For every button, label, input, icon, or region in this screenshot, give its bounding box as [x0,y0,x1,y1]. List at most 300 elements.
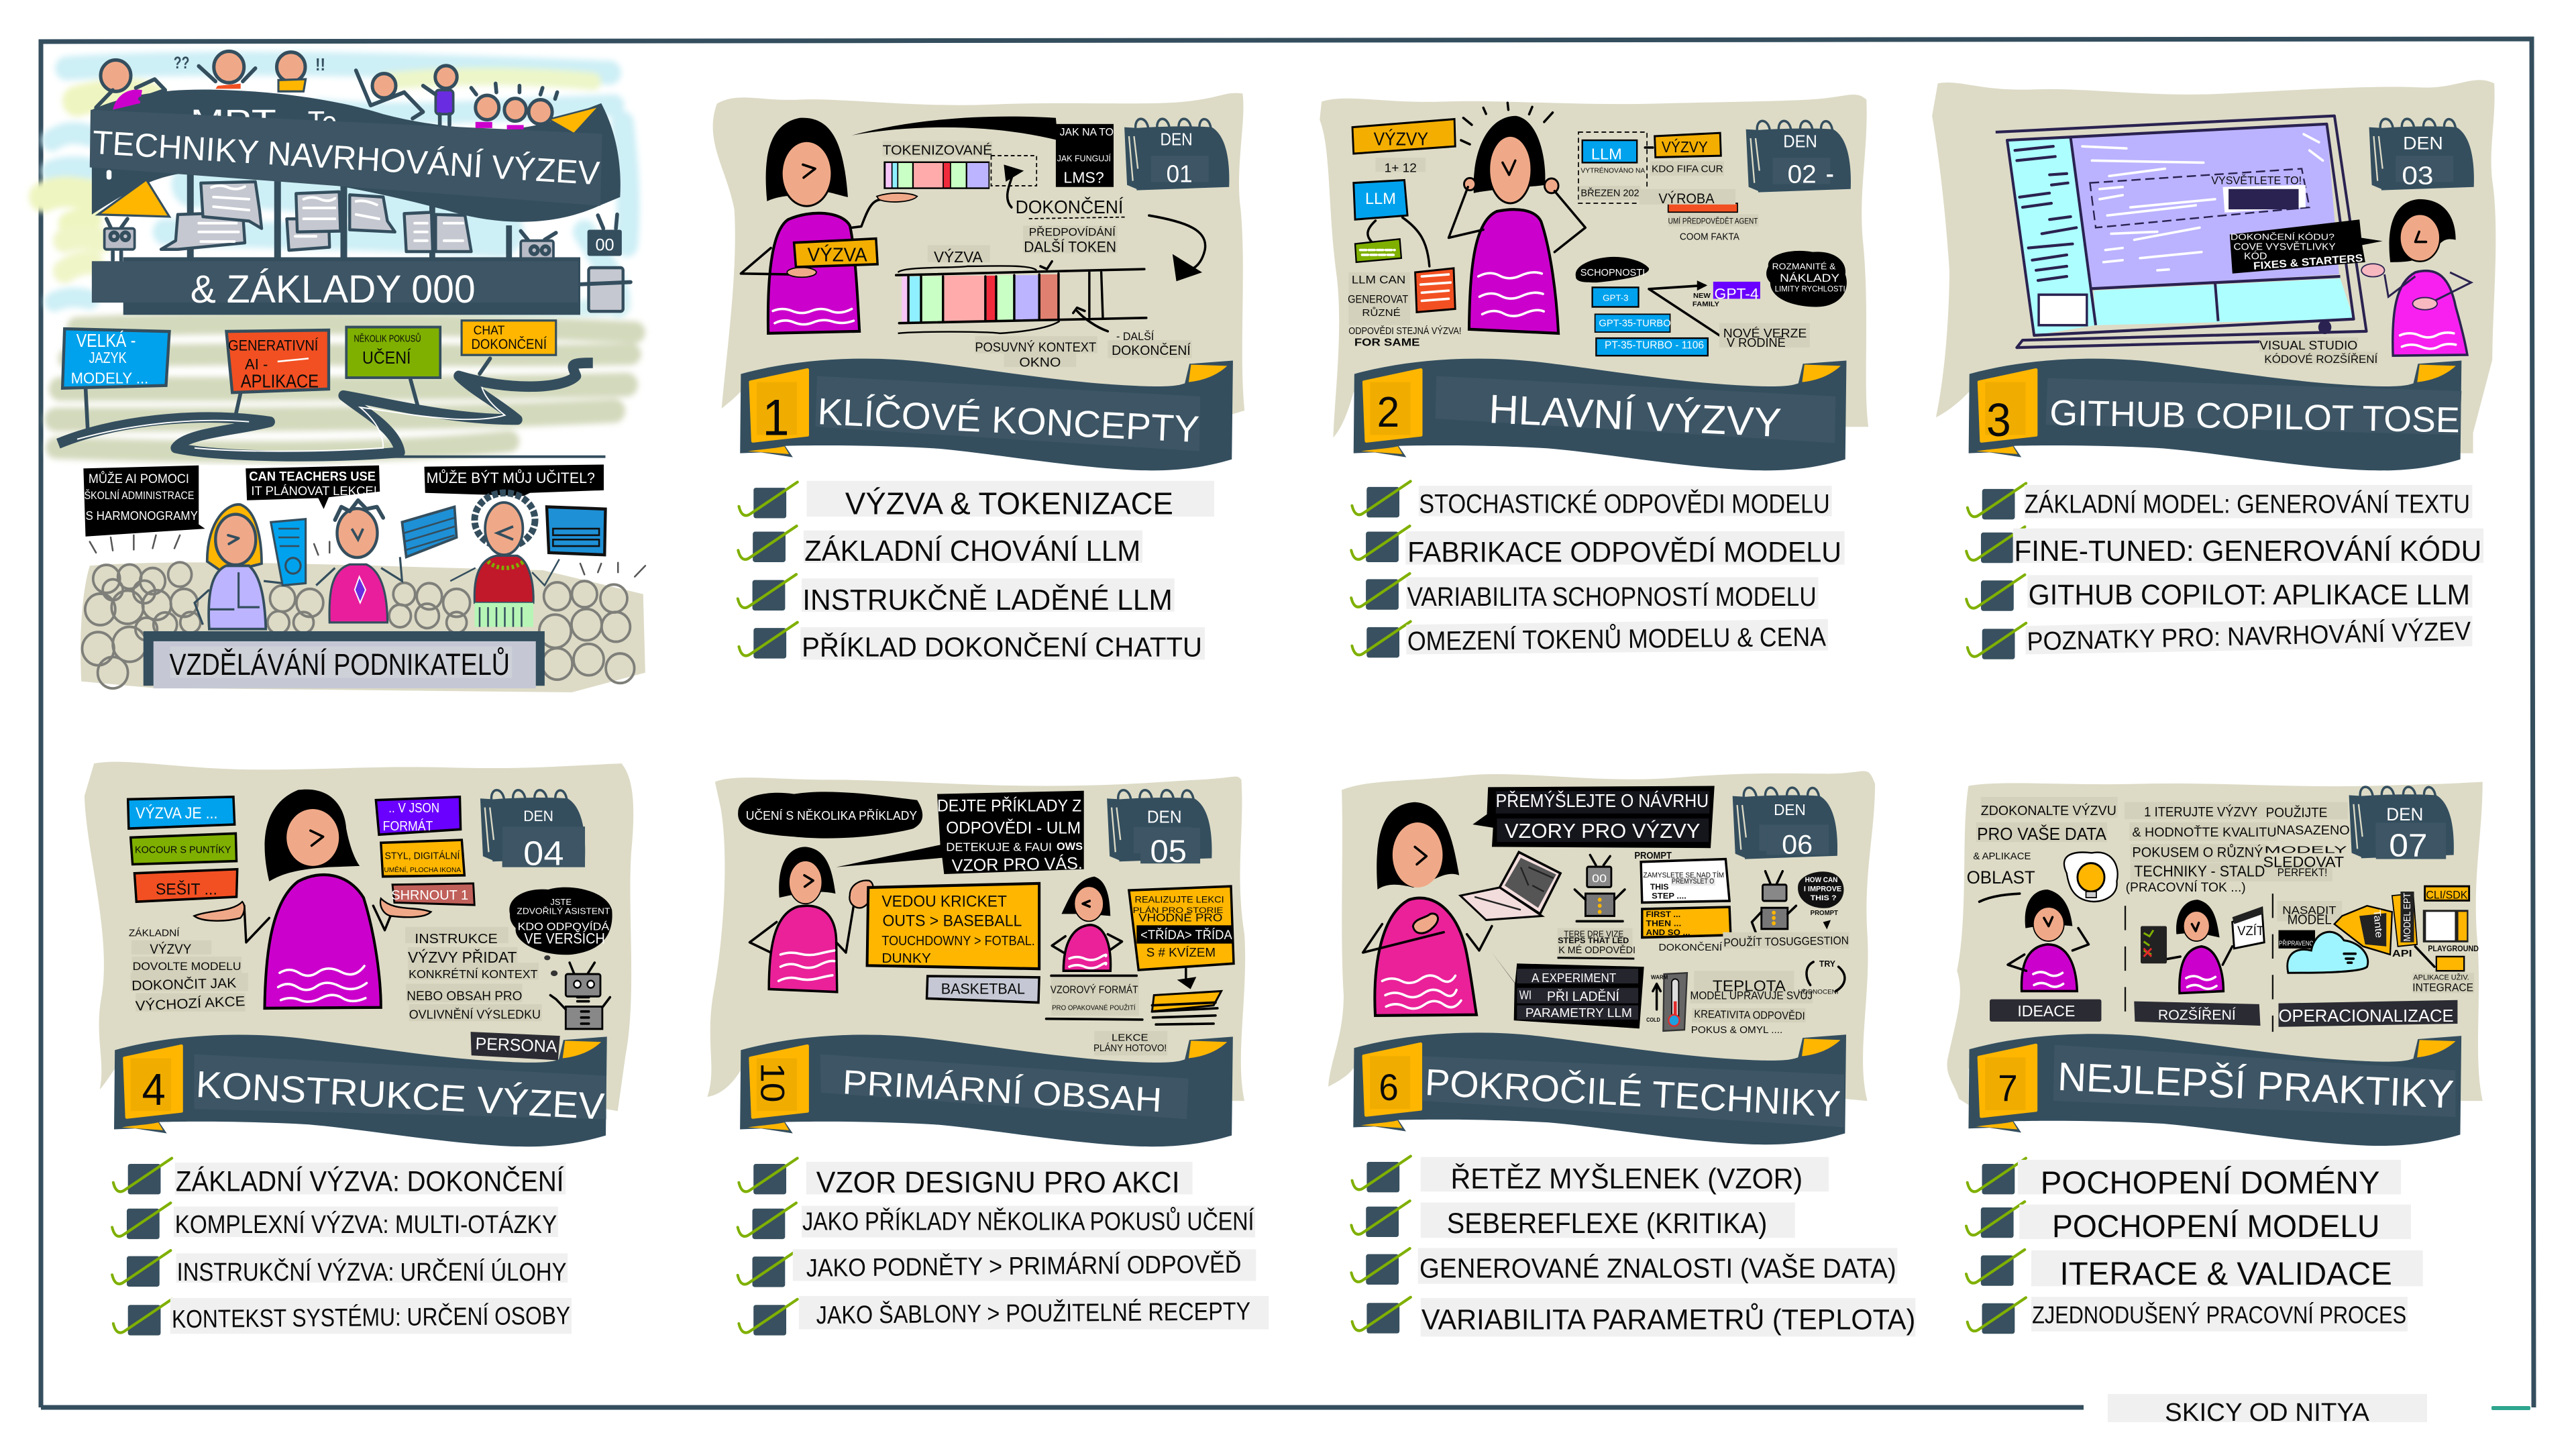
steps note: TERE DRE VIZE [1564,929,1623,938]
sign: large language models: JAZYK [89,348,127,366]
class template card: PLÁN PRO STORIE [1133,906,1224,915]
sign: chat completion [462,321,556,374]
banner heading: GITHUB COPILOT TOSE [2049,393,2460,441]
cloud: few-shot [738,792,922,839]
completion labels: DOKONČENÍ [1016,196,1124,217]
experiment callout: WI [1519,988,1532,1002]
sliding window bar: OKNO [1019,356,1061,370]
calendar day 06: DEN [1774,802,1806,818]
training data note: UMÍ PŘEDPOVĚDĚT AGENT [1668,217,1758,225]
deployment diagram: CLI/SDK [2426,888,2467,901]
right note [405,927,542,1022]
basketball answer [927,976,1039,1002]
temperature note: POKUS & OMYL .... [1691,1025,1782,1036]
thought cloud [509,888,612,976]
characters on the ribbon: ?? [174,54,190,72]
iterate note: TECHNIKY - STALD [2134,863,2265,880]
checklist: ZÁKLADNÍ CHOVÁNÍ LLM [804,535,1140,568]
backdrop [1947,782,2483,1105]
sign: generative AI apps: AI - [245,356,268,373]
black callout: DOKONČENÍ KÓDU? [2231,231,2334,242]
winding road [58,363,593,456]
model capabilities: GPT-3 [1603,292,1629,303]
model capabilities: PT-35-TURBO - 1106 [1605,339,1704,351]
iterate note: POKUSEM O RŮZNÝ [2132,844,2263,861]
yellow example card: VEDOU KRICKET [881,892,1007,910]
sliding window bar [896,245,1192,370]
banner heading [1968,1034,2461,1146]
checklist: ITERACE & VALIDACE [2059,1256,2392,1292]
deployment diagram: INTEGRACE [2412,982,2473,994]
stack of plans [1093,969,1222,1055]
template format: PRO OPAKOVANÉ POUŽITÍ [1052,1004,1136,1012]
checklist: INSTRUKČNÍ VÝZVA: URČENÍ ÚLOHY [177,1258,566,1286]
checklist: JAKO PŘÍKLADY NĚKOLIKA POKUSŮ UČENÍ [802,1207,1254,1236]
calendar day 05: 05 [1150,833,1187,869]
educator: teacher [316,500,457,623]
steps note: K MÉ ODPOVĚDI [1558,945,1635,956]
thought cloud: VE VERŠÍCH [524,930,605,947]
temperature note: MODEL UPRAVUJE SVŮJ [1690,989,1813,1002]
right note: OVLIVNĚNÍ VÝSLEDKU [409,1007,541,1022]
checklist: OMEZENÍ TOKENŮ MODELU & CENA [1407,621,1826,657]
pillars and robots [105,173,631,311]
backdrop [1320,95,1868,438]
right prompt cards: UMĚNÍ, PLOCHA IKONA [384,865,462,874]
left note [129,927,248,1014]
stochastic text: GENEROVAT [1348,292,1408,306]
steps note [1558,928,1635,959]
banner heading: HLAVNÍ VÝZVY [1488,386,1782,445]
class template card: S # KVÍZEM [1146,945,1216,959]
ideation column [1967,797,2118,902]
checklist: STOCHASTICKÉ ODPOVĚDI MODELU [1419,490,1830,519]
checklist: JAKO ŠABLONY > POUŽITELNÉ RECEPTY [816,1297,1250,1329]
cloud: cost and limits: ROZMANITÉ & [1772,261,1836,272]
callout: give examples: OWS [1057,841,1083,853]
backdrop [707,777,1245,1101]
checklist: JAKO PODNĚTY > PRIMÁRNÍ ODPOVĚĎ [806,1250,1242,1282]
calendar day 06 [1733,788,1837,860]
try evaluate loop [1798,959,1845,996]
thought cloud: ZDVOŘILÝ ASISTENT [517,906,610,916]
prompt to LLM flow: VÝZVY [1374,128,1428,149]
calendar day 03 [2369,119,2474,191]
temperature note: TEPLOTA [1713,977,1786,995]
augmentation person: VZÍT [2237,924,2265,938]
right note: INSTRUKCE [415,932,498,947]
right prompt cards: STYL, DIGITÁLNÍ [385,850,460,862]
watercolor ground [56,323,635,452]
callout: give examples: ODPOVĚDI - ULM [946,819,1081,838]
right prompt cards: .. V JSON [388,800,439,816]
crowd backdrop [80,562,645,692]
iterate note: 1 ITERUJTE VÝZVY [2144,804,2258,820]
left note: DOVOLTE MODELU [133,960,241,973]
iterate note: MODELY [2264,845,2347,856]
sign: generative AI apps: GENERATIVNÍ [228,337,318,354]
model capabilities: FAMILY [1693,301,1719,308]
checklist: GITHUB COPILOT: APLIKACE LLM [2029,579,2470,610]
accent stroke [2491,1406,2530,1410]
characters on the ribbon [96,51,557,129]
calendar day 01: 01 [1167,160,1193,188]
banner heading: KONSTRUKCE VÝZEV [195,1063,605,1128]
persona tag: PERSONA [475,1035,557,1057]
prompt cards: AND SO ... [1646,928,1690,937]
callout: design patterns: VZORY PRO VÝZVY [1505,820,1701,843]
checklist [112,1159,572,1336]
panel: day 6 advanced techniques [1328,771,1915,1336]
sign: few-shot learning: NĚKOLIK POKUSŮ [354,332,421,344]
experiment callout [1492,953,1644,1028]
right note: NEBO OBSAH PRO [407,989,522,1004]
characters on the ribbon: !! [315,56,325,74]
stochastic text [1348,272,1461,349]
iterate note: & HODNOŤTE KVALITU [2132,825,2277,840]
iterate note: NASAZENO [2277,824,2350,838]
calendar day 02: DEN [1783,133,1817,152]
checklist: VARIABILITA PARAMETRŮ (TEPLOTA) [1421,1303,1915,1336]
cloud: cost and limits: LIMITY RYCHLOSTI [1775,284,1845,294]
ribbon: main title: Te [308,106,337,140]
watercolor sky [44,64,628,309]
banner heading: NEJLEPŠÍ PRAKTIKY [2057,1055,2455,1117]
model capabilities: V RODINĚ [1727,335,1786,350]
banner heading: 7 [1998,1067,2018,1109]
thermometer: COLD [1646,1017,1660,1023]
arrow: big curved [1149,215,1205,281]
sliding window bar: VÝZVA [934,248,983,266]
persona tag [471,1032,560,1060]
sign: few-shot learning: UČENÍ [362,348,411,368]
robot: self reflection: HOW CAN [1805,876,1837,884]
class template card: REALIZUJTE LEKCI [1134,894,1224,904]
yellow example card: DUNKY [881,951,931,966]
ideation column: OBLAST [1967,867,2035,888]
prompt to LLM flow: LLM [1365,191,1396,208]
ideation column: PRO VAŠE DATA [1977,824,2106,844]
class template card [1129,886,1234,970]
robot: think: 00 [1592,872,1607,885]
completion labels: DALŠÍ TOKEN [1024,238,1116,256]
model capabilities: NOVÉ VERZE [1723,326,1807,340]
sign: large language models: MODELY ... [71,369,148,387]
robot: self reflection: PROMPT [1811,910,1838,917]
left prompt cards [128,797,237,902]
banner heading: PRIMÁRNÍ OBSAH [842,1063,1163,1120]
callout: give examples: DETEKUJE & FAUI [946,841,1052,854]
panel: day 3 github copilot [1932,80,2496,659]
deployment diagram: MODEL EPT [2402,892,2413,942]
prompt cards [1634,851,1731,938]
extension label: VISUAL STUDIO [2259,339,2357,352]
calendar day 03: DEN [2403,133,2443,154]
checklist: ZJEDNODUŠENÝ PRACOVNÍ PROCES [2032,1301,2406,1329]
checklist: SEBEREFLEXE (KRITIKA) [1447,1208,1767,1239]
cloud: cost and limits [1766,251,1847,307]
stack of plans: LEKCE [1112,1032,1148,1044]
panel: day 7 best practices [1947,782,2483,1334]
banner heading [740,1034,1233,1146]
panel: day 2 main challenges [1320,95,1868,657]
credit [2108,1394,2427,1427]
swoosh and black note [852,117,1114,187]
deployment diagram: Tante [2371,909,2384,938]
completion note: POUŽÍT TOSUGGESTION [1723,934,1849,949]
iterate note: (PRACOVNÍ TOK ...) [2126,881,2246,895]
idea person with bulb [2008,853,2118,991]
calendar day 03: 03 [2402,162,2433,190]
training data note: VÝZVY [1662,139,1708,156]
credit: SKICY OD NITYA [2165,1399,2370,1427]
deployment diagram: PLAYGROUND [2428,944,2479,953]
banner heading: 3 [1986,395,2011,447]
augmentation tag [2134,1002,2261,1026]
right note: KONKRÉTNÍ KONTEXT [409,968,538,981]
checklist: VARIABILITA SCHOPNOSTÍ MODELU [1407,582,1817,612]
completion labels [1016,196,1127,256]
model capabilities: GPT-4 [1715,286,1759,302]
banner heading: 4 [142,1065,166,1115]
prompt cards: PROMPT [1634,851,1672,861]
callout: design patterns: PŘEMÝŠLEJTE O NÁVRHU [1496,790,1709,811]
checklist: POCHOPENÍ DOMÉNY [2041,1165,2379,1200]
calendar day 04: DEN [523,808,553,824]
banner heading [740,359,1233,470]
robot [550,963,610,1029]
callout: give examples: VZOR PRO VÁS. [951,855,1083,875]
calendar day 05 [1107,790,1212,869]
speech: admin: MŮŽE AI POMOCI [89,471,189,486]
left note: ZÁKLADNÍ [129,927,180,939]
speech: lesson plans [246,466,380,509]
calendar day 07: 07 [2389,827,2428,864]
completion note: DOKONČENÍ [1658,942,1723,953]
calendar day 02 [1746,121,1851,193]
swoosh and black note: JAK FUNGUJÍ [1057,153,1111,164]
speech: lesson plans: IT PLÁNOVAT LEKCE! [251,484,377,498]
robot: self reflection: I IMPROVE [1804,885,1841,894]
sign: generative AI apps: APLIKACE [241,371,319,391]
checklist [1351,481,1845,657]
calendar day 01: DEN [1160,131,1193,149]
checklist: POCHOPENÍ MODELU [2052,1208,2379,1244]
sliding window bar: - DALŠÍ [1116,330,1155,343]
checklist: GENEROVANÉ ZNALOSTI (VAŠE DATA) [1419,1253,1896,1284]
operationalize tag [2279,1000,2457,1027]
checklist: KONTEKST SYSTÉMU: URČENÍ OSOBY [172,1301,570,1333]
checklist: ŘETĚZ MYŠLENEK (VZOR) [1451,1163,1803,1195]
calendar day 06: 06 [1782,830,1813,860]
training data note: COOM FAKTA [1680,231,1739,243]
black callout: KÓD [2244,250,2267,262]
swoosh and black note: LMS? [1063,169,1104,186]
educator: administrator [195,504,306,629]
deployment diagram: API [2392,949,2412,959]
deployment diagram: MODEL [2288,912,2332,928]
steps note: STEPS THAT LED [1558,936,1629,945]
sign: chat completion: DOKONČENÍ [471,337,547,352]
class template card: VHODNÉ PRO [1138,911,1222,924]
iterate note: SLEDOVAT [2263,854,2344,871]
confused person [1449,103,1585,333]
deployment diagram: NASADIT [2282,904,2337,916]
stack of plans: PLÁNY HOTOVO! [1093,1042,1167,1054]
swoosh and black note: JAK NA TO [1060,126,1114,138]
sign: chat completion: CHAT [474,323,505,337]
checklist: KOMPLEXNÍ VÝZVA: MULTI-OTÁZKY [175,1210,557,1238]
ribbon: subtitle [92,257,580,315]
small person [1052,877,1122,971]
banner heading: 6 [1379,1067,1399,1108]
banner heading: 1 [763,389,790,446]
speech: tutor: MŮŽE BÝT MŮJ UČITEL? [427,469,595,486]
basketball answer: BASKETBAL [941,980,1025,998]
banner heading: KLÍČOVÉ KONCEPTY [817,390,1200,451]
extension label: KÓDOVÉ ROZŠÍŘENÍ [2264,353,2378,366]
checklist: ZÁKLADNÍ VÝZVA: DOKONČENÍ [176,1166,564,1197]
augmentation person [2141,900,2265,994]
ideation column: ZDOKONALTE VÝZVU [1981,803,2116,818]
stochastic text: RŮZNÉ [1362,306,1401,319]
experiment callout: PŘI LADĚNÍ [1547,989,1620,1004]
banner heading [1354,359,1846,470]
pillars and robots: 00 [596,236,614,255]
left note: VÝCHOZÍ AKCE [135,994,246,1014]
person explaining [194,790,431,1008]
sliding window bar: DOKONČENÍ [1112,342,1191,358]
iterate note: POUŽIJTE [2266,805,2327,820]
sliding window bar: POSUVNÝ KONTEXT [975,341,1097,355]
cloud: cost and limits: NÁKLADY [1780,272,1839,284]
try evaluate loop: TRY [1819,959,1835,969]
podium label [144,631,545,688]
code editor window: VYSVĚTLETE TO! [2211,174,2302,187]
prompt cards: FIRST ... [1646,910,1680,919]
banner heading [114,1034,607,1146]
experiment callout: PARAMETRY LLM [1525,1006,1632,1020]
right note: VÝZVY PŘIDAT [408,949,517,966]
backdrop [713,93,1244,415]
right prompt cards: FORMÁT [383,818,433,834]
tokenized bar: TOKENIZOVANÉ [883,142,992,158]
ribbon: main title [90,90,621,222]
template format [1046,975,1142,1020]
panel: title and overview [44,51,645,692]
speech: admin: ŠKOLNÍ ADMINISTRACE [85,489,194,502]
temperature note: KREATIVITA ODPOVĚDI [1694,1007,1805,1022]
sign: few-shot learning [346,327,440,410]
checklist: PŘÍKLAD DOKONČENÍ CHATTU [802,632,1202,663]
training data note: VÝROBA [1658,191,1715,207]
banner heading: 2 [1377,389,1399,437]
checklist: FINE-TUNED: GENEROVÁNÍ KÓDU [2014,535,2481,568]
speech: admin: S HARMONOGRAMY [85,509,198,523]
thought cloud: KDO ODPOVÍDÁ [518,921,610,933]
ideation column: & APLIKACE [1973,851,2031,862]
sign: large language models [62,329,169,428]
checklist: FABRIKACE ODPOVĚDÍ MODELU [1407,536,1841,568]
temperature note [1690,971,1813,1036]
calendar day 02: 02 [1788,160,1817,189]
speech: lesson plans: CAN TEACHERS USE [249,470,376,484]
training data note: LLM [1591,146,1622,163]
calendar day 04 [480,790,585,873]
sign: generative AI apps [227,330,329,415]
panel: day 4 prompt construction [85,762,633,1336]
calendar day 07 [2349,787,2454,864]
checklist [738,1159,1269,1336]
completion labels: PŘEDPOVÍDÁNÍ [1029,225,1116,239]
robot: self reflection [1752,871,1844,932]
speech: tutor [424,464,604,496]
bubble text strokes [199,186,463,241]
column dashes [2125,894,2273,1032]
calendar day 01 [1124,119,1229,191]
banner heading [1969,359,2461,470]
ribbon: main title: TECHNIKY NAVRHOVÁNÍ VÝZEV [91,124,601,193]
thermometer: WARM [1651,974,1668,980]
educator: tutor [450,493,605,627]
thermometer [1646,973,1687,1031]
model capabilities [1576,257,1810,356]
left note: VÝZVY [150,941,191,957]
checklist [1351,1156,1915,1336]
calendar day 04: 04 [523,834,564,873]
calendar day 07: DEN [2386,804,2423,824]
cloud: few-shot: UČENÍ S NĚKOLIKA PŘÍKLADY [746,808,917,822]
callout: give examples: DEJTE PŘÍKLADY Z [937,797,1081,816]
completion note [1658,932,1849,953]
stochastic text: FOR SAME [1354,337,1419,349]
crowd [82,535,645,688]
template format: VZOROVÝ FORMÁT [1051,984,1138,996]
stochastic text: LLM CAN [1352,273,1405,286]
developer person [2361,199,2471,356]
backdrop [85,762,633,1111]
person with prompt [741,118,917,333]
panel: day 5 primary content [707,777,1269,1336]
ribbon: subtitle: & ZÁKLADY 000 [191,268,476,311]
sign: large language models: VELKÁ - [76,330,136,351]
checklist: INSTRUKČNĚ LADĚNÉ LLM [802,584,1173,616]
checklist [1966,1159,2423,1334]
training data note: KDO FIFA CUR [1652,164,1723,174]
deployment diagram: PŘIPRAVENO [2279,940,2314,948]
model capabilities: GPT-35-TURBO [1599,318,1671,329]
iterate note: PERFEKT! [2277,867,2327,879]
panel: day 1 key concepts [713,93,1244,663]
callout: design patterns [1472,786,1715,848]
class template card: <TŘÍDA> TŘÍDA [1140,927,1232,943]
stochastic text: ODPOVĚDI STEJNÁ VÝZVA! [1348,325,1461,337]
experiment callout: A EXPERIMENT [1532,971,1617,985]
prompt cards: PŘEMÝŠLET O [1672,877,1714,885]
backdrop [1328,771,1875,1101]
ribbon: main title: MPT [191,103,276,140]
try evaluate loop: HODNOCENÍ [1798,989,1839,996]
right prompt cards [376,797,474,905]
robot: think [1574,855,1625,921]
training data note: BŘEZEN 202 [1580,187,1640,199]
divider [274,455,605,458]
prompt to LLM flow: 1+ 12 [1385,161,1417,174]
extension label [2259,337,2378,366]
thought cloud: JSTE [550,898,572,907]
prompt cards: ZAMYSLETE SE NAD TÍM [1644,871,1724,879]
black callout [2230,219,2383,274]
